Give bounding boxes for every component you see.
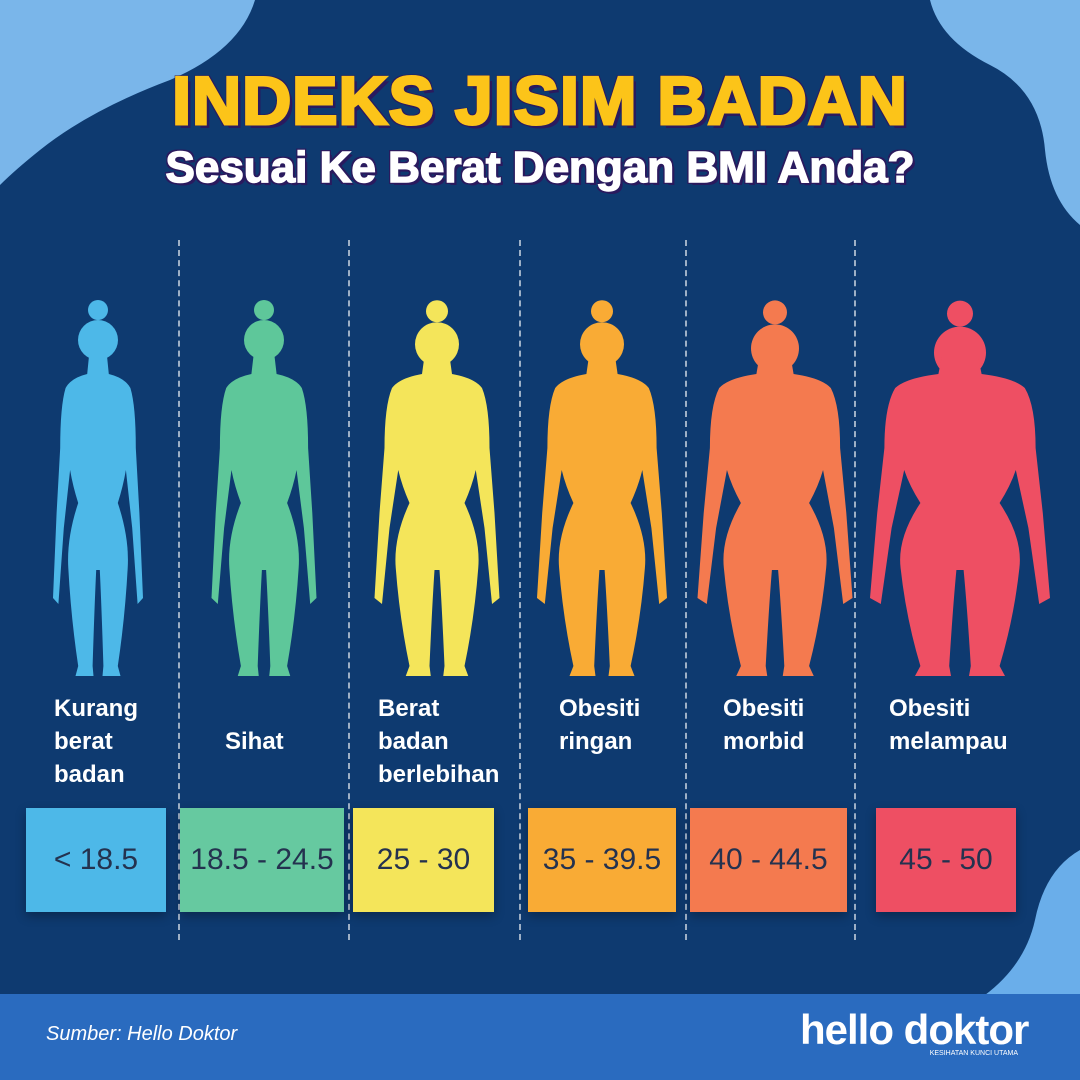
figure: underweight	[53, 300, 143, 676]
box 2	[180, 808, 344, 912]
box 4: 35 - 39.5	[543, 843, 661, 876]
label 6	[889, 695, 1008, 755]
label 5: Obesiti	[723, 695, 804, 722]
box 2: 18.5 - 24.5	[190, 843, 334, 876]
box 3	[353, 808, 494, 912]
box 5	[690, 808, 847, 912]
label 1	[54, 695, 138, 788]
box 1: < 18.5	[54, 843, 138, 876]
label 4: Obesiti	[559, 695, 640, 722]
label 5: morbid	[723, 728, 804, 755]
footer	[0, 994, 1080, 1080]
label 6: melampau	[889, 728, 1008, 755]
label 3: badan	[378, 728, 449, 755]
box 6	[876, 808, 1016, 912]
label 5	[723, 695, 804, 755]
label 4	[559, 695, 640, 755]
label 3: Berat	[378, 695, 439, 722]
label 3: berlebihan	[378, 761, 499, 788]
figure: morbid	[698, 300, 852, 676]
box 3: 25 - 30	[377, 843, 470, 876]
logo: KESIHATAN KUNCI UTAMA	[930, 1050, 1018, 1057]
label 3	[378, 695, 499, 788]
figure: overweight	[374, 300, 500, 676]
box 4	[528, 808, 676, 912]
label 1: badan	[54, 761, 125, 788]
box 1	[26, 808, 166, 912]
label 1: berat	[54, 728, 113, 755]
figure: extreme	[870, 301, 1050, 676]
logo: hello doktor	[800, 1006, 1028, 1053]
source: Sumber: Hello Doktor	[46, 1023, 237, 1045]
figure: healthy	[212, 300, 316, 676]
box 5: 40 - 44.5	[709, 843, 828, 876]
label 2: Sihat	[225, 728, 284, 755]
subtitle: Sesuai Ke Berat Dengan BMI Anda?	[166, 143, 914, 192]
label 6: Obesiti	[889, 695, 970, 722]
figure: obese mild	[537, 300, 667, 676]
label 4: ringan	[559, 728, 632, 755]
title: INDEKS JISIM BADAN	[172, 63, 908, 139]
box 6: 45 - 50	[899, 843, 993, 876]
label 1: Kurang	[54, 695, 138, 722]
